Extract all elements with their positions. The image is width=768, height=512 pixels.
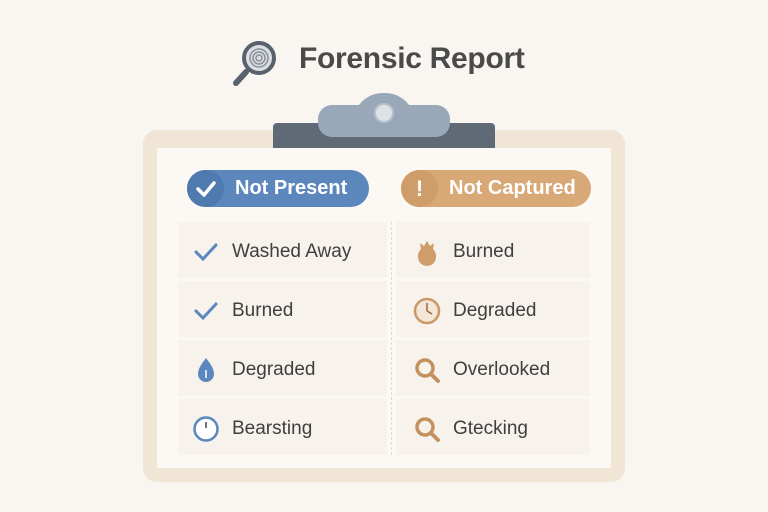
row: Gtecking [396, 399, 590, 455]
left column rows [178, 222, 387, 455]
row: Degraded [396, 281, 590, 337]
pill: Not Captured: Not Captured [449, 177, 576, 199]
pill: Not Captured [401, 170, 591, 207]
row: Burned [178, 281, 387, 337]
row: Degraded: Degraded [453, 300, 536, 320]
right column rows [396, 222, 590, 455]
pill: Not Captured: ! [416, 176, 423, 200]
row: Bearsting [178, 399, 387, 455]
paper [157, 148, 611, 468]
row: Gtecking: Gtecking [453, 418, 528, 438]
clipboard clip [273, 93, 495, 148]
row: Washed Away: Washed Away [232, 240, 351, 262]
row: Burned [396, 222, 590, 278]
row: Overlooked: Overlooked [453, 358, 550, 380]
icon: magnifier fingerprint [233, 41, 276, 86]
row: Overlooked [396, 340, 590, 396]
row: Degraded [178, 340, 387, 396]
clipboard board [143, 130, 625, 482]
row: Washed Away [178, 222, 387, 278]
row: Degraded: Degraded [232, 358, 315, 380]
pill: Not Present [187, 170, 369, 207]
column divider [391, 222, 392, 455]
title: Forensic Report [299, 42, 525, 75]
row: Bearsting: Bearsting [232, 418, 312, 438]
title [233, 41, 525, 86]
row: Burned: Burned [453, 240, 514, 262]
row: Burned: Burned [232, 300, 293, 320]
pill: Not Present: Not Present [235, 177, 347, 199]
